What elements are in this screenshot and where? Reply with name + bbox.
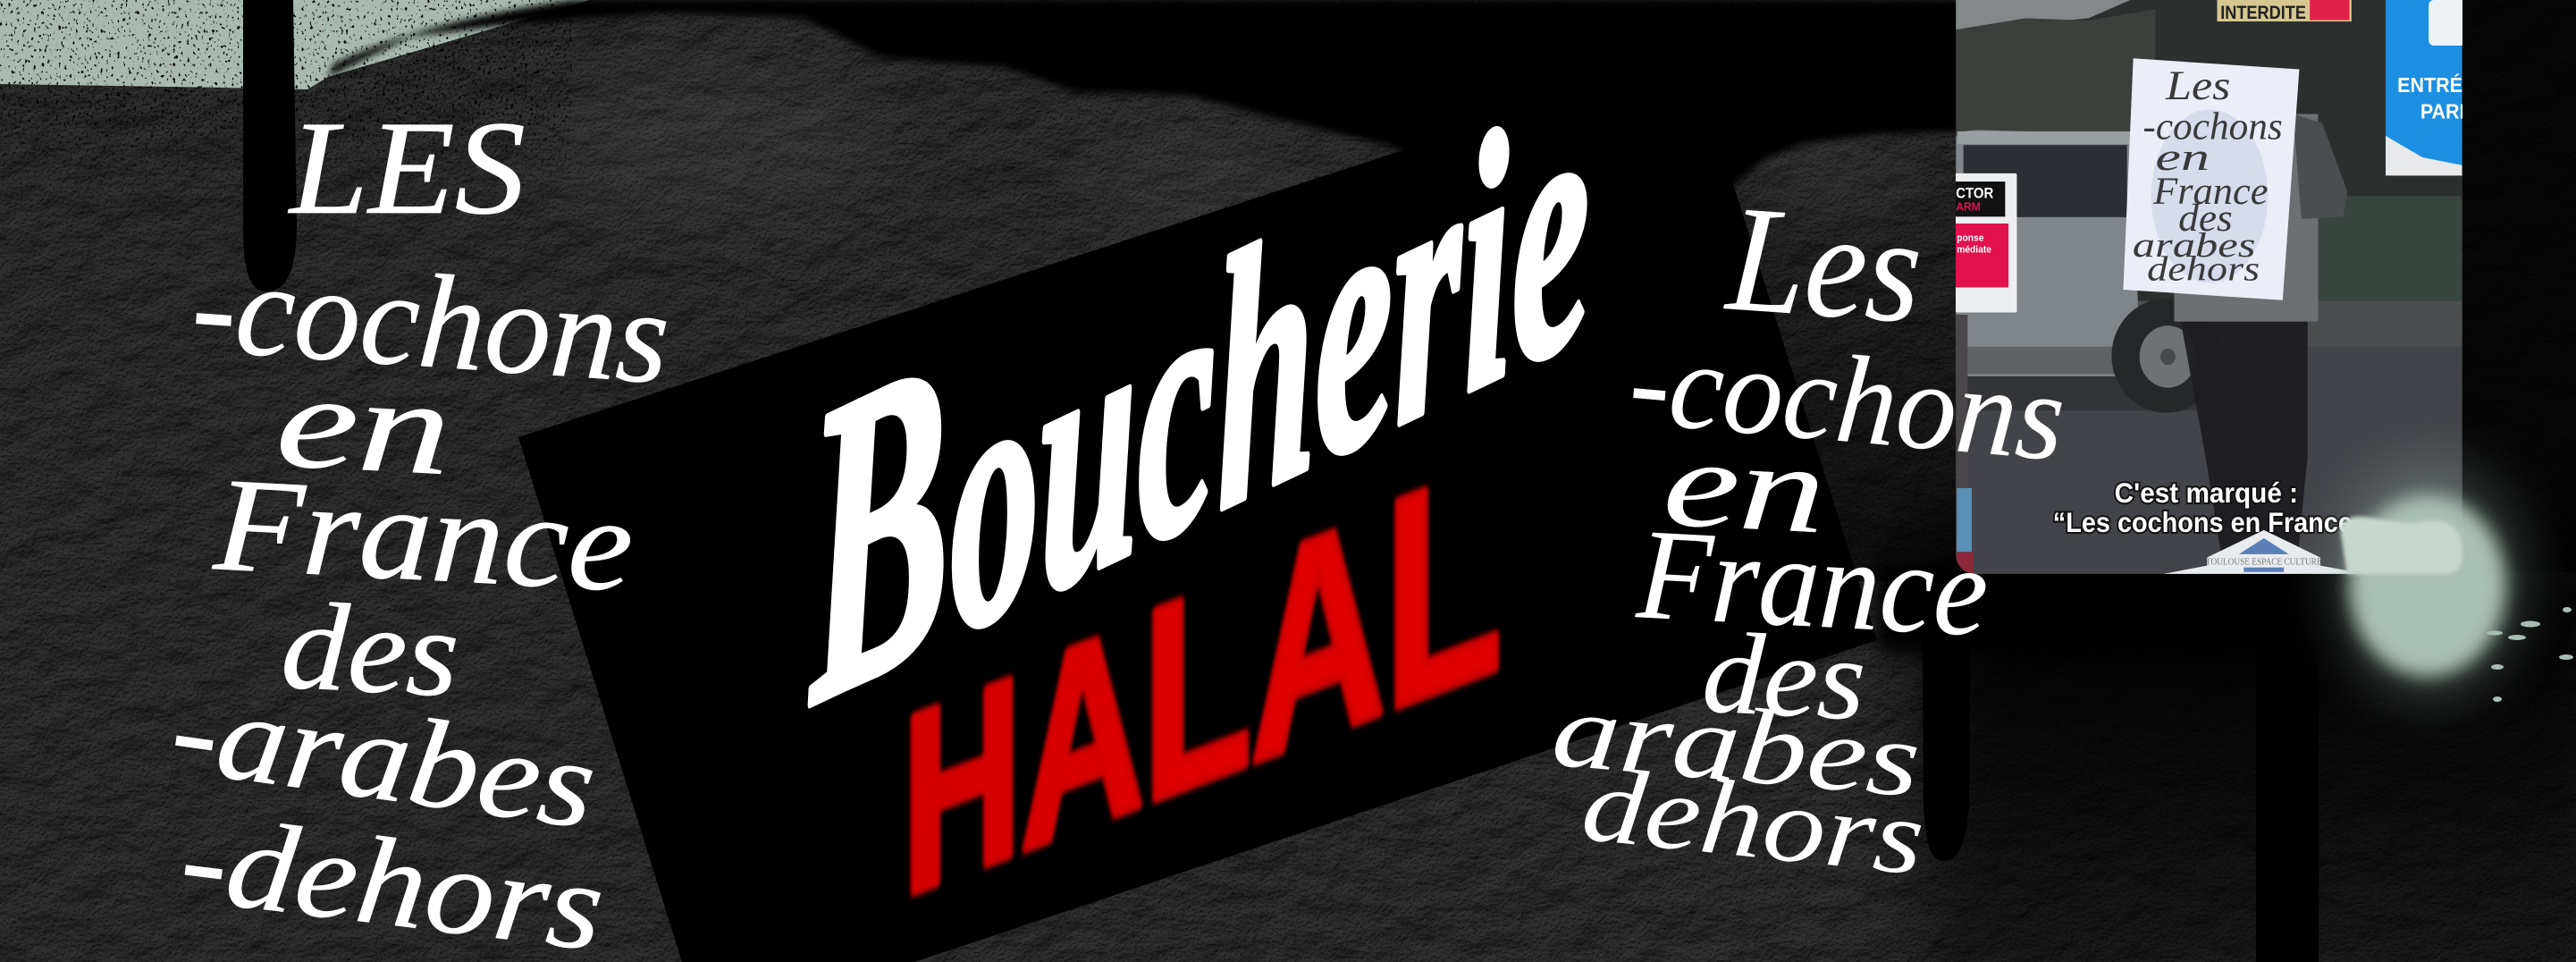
line: dehors: dehors (1577, 744, 1930, 898)
hedge behind the car (1956, 9, 2155, 137)
black torn paint area across the top (328, 0, 1966, 268)
panel: tilted black shop sign (518, 0, 1877, 962)
parked silver car (1956, 130, 2220, 413)
line: France: France (210, 450, 636, 620)
white protest sign: Les (2165, 62, 2230, 109)
pavement strip (1956, 301, 2462, 351)
line: Les: Les (1722, 173, 1927, 355)
white protest sign: France (2152, 169, 2268, 212)
photo backdrop (1956, 0, 2462, 574)
line: cochons: -cochons (1624, 311, 2070, 487)
pale green spray blob (2322, 451, 2573, 711)
sign word: Boucherie: Boucherie (798, 0, 1595, 797)
photo: protester holding a sign in a car park (1951, 0, 2507, 574)
alarm sticker: CTOR (1956, 186, 1993, 202)
left strip of a second image (1956, 315, 1974, 574)
alarm sticker: ARM (1956, 199, 1981, 214)
line: cochons: -cochons (188, 231, 674, 412)
line: LES: LES (288, 94, 526, 242)
alarm sticker (1951, 173, 2016, 312)
blue poster: ENTRÉE (2397, 73, 2475, 97)
handwritten slogan, left (164, 94, 674, 962)
line: arabes: arabes (1548, 669, 1925, 820)
panel: pale green painted corner (0, 0, 590, 215)
black paint drip, top left (243, 0, 297, 291)
alarm sticker: ponse (1957, 232, 1983, 244)
sky (1956, 0, 2130, 32)
person holding the sign (2174, 114, 2347, 561)
white protest sign: des (2178, 197, 2233, 240)
white protest sign: dehors (2147, 250, 2260, 289)
logo: Toulouse Espace Culture tent (2164, 530, 2366, 574)
sign background (518, 56, 1877, 962)
line: France: France (1633, 502, 1991, 663)
spray droplets (2487, 607, 2573, 702)
blue poster (2386, 0, 2507, 175)
black paint drip, under the photo right (2256, 572, 2319, 962)
logo: Toulouse Espace Culture tent: TOULOUSE ESPACE CULTURE (2206, 557, 2322, 568)
subtitle caption (2053, 478, 2360, 538)
black paint drip, under the photo left (1922, 572, 1971, 861)
warning sign: interdite: INTERDITE (2220, 2, 2306, 23)
line: des: des (278, 576, 462, 723)
low hedge right (2319, 197, 2462, 301)
alarm sticker: médiate (1957, 244, 1991, 256)
blue poster: PARKING (2420, 100, 2507, 123)
subtitle caption: C'est marqué : (2115, 478, 2298, 510)
warning sign: interdite (2217, 0, 2352, 23)
line: en: en (273, 346, 455, 503)
white protest sign: en (2155, 135, 2210, 178)
white protest sign: -cochons (2142, 105, 2283, 148)
white protest sign: arabes (2133, 227, 2255, 266)
handwritten slogan, right (1548, 173, 2070, 898)
line: arabes: -arabes (164, 659, 604, 856)
dark shading, lower right wall (1731, 0, 2576, 962)
line: des: des (1699, 608, 1869, 745)
road (1956, 347, 2462, 574)
white protest sign (2123, 58, 2299, 300)
sign word: HALAL: HALAL (903, 399, 1502, 959)
lighter wrinkled patches on the wall (536, 63, 1913, 232)
line: en: en (1660, 413, 1829, 560)
subtitle caption: “Les cochons en France, (2053, 508, 2360, 538)
